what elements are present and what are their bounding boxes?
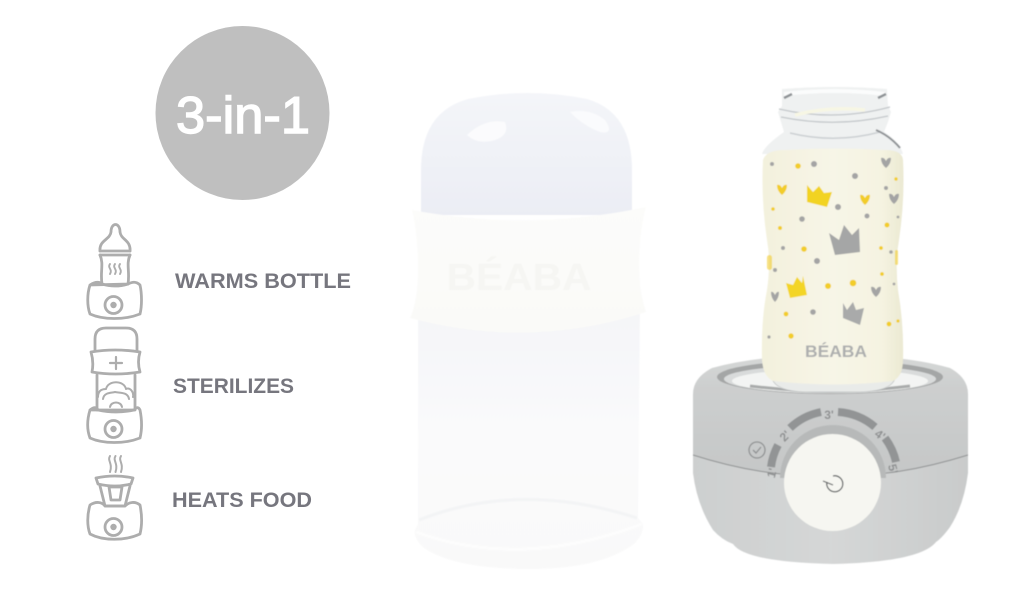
bottle bottom glass bbox=[772, 378, 895, 392]
yellow dots bbox=[767, 163, 900, 339]
milk-filled body bbox=[762, 148, 904, 384]
jar dome lid bbox=[421, 93, 632, 215]
jar lower body bbox=[415, 300, 643, 569]
dial scale: 4' bbox=[872, 427, 888, 444]
label: sterilizes: STERILIZES bbox=[173, 374, 294, 398]
bottle logo: BÉABA bbox=[805, 342, 867, 361]
base upper shell bbox=[693, 355, 968, 477]
base lower shell bbox=[693, 445, 968, 564]
product: sterilizer jar bbox=[410, 93, 646, 569]
icon: heats food bbox=[88, 456, 142, 539]
bottle glass neck bbox=[762, 87, 903, 154]
icon: sterilizes bbox=[88, 328, 142, 442]
warmer well bbox=[717, 360, 943, 394]
crowns bbox=[786, 185, 864, 325]
label: heats food: HEATS FOOD bbox=[172, 488, 312, 512]
dial scale: 1' bbox=[764, 466, 780, 479]
jar silicone band bbox=[410, 207, 646, 333]
product: warmer base bbox=[693, 355, 968, 564]
dial scale bbox=[764, 408, 901, 479]
icon: timer bbox=[749, 442, 765, 458]
seam bbox=[693, 455, 968, 477]
product: glass bottle bbox=[762, 87, 904, 392]
dial scale: 2' bbox=[777, 428, 793, 444]
dial scale: 3' bbox=[824, 408, 834, 422]
icon: power bbox=[823, 476, 843, 492]
icon: warms bottle bbox=[88, 224, 142, 318]
badge: 3-in-1 bbox=[156, 26, 330, 200]
dial knob bbox=[780, 425, 886, 531]
dial scale: 5' bbox=[885, 463, 901, 476]
grey dots bbox=[767, 158, 899, 339]
jar silicone band: BÉABA bbox=[446, 255, 592, 299]
label: warms bottle: WARMS BOTTLE bbox=[175, 269, 351, 293]
badge: 3-in-1: 3-in-1 bbox=[176, 87, 310, 145]
